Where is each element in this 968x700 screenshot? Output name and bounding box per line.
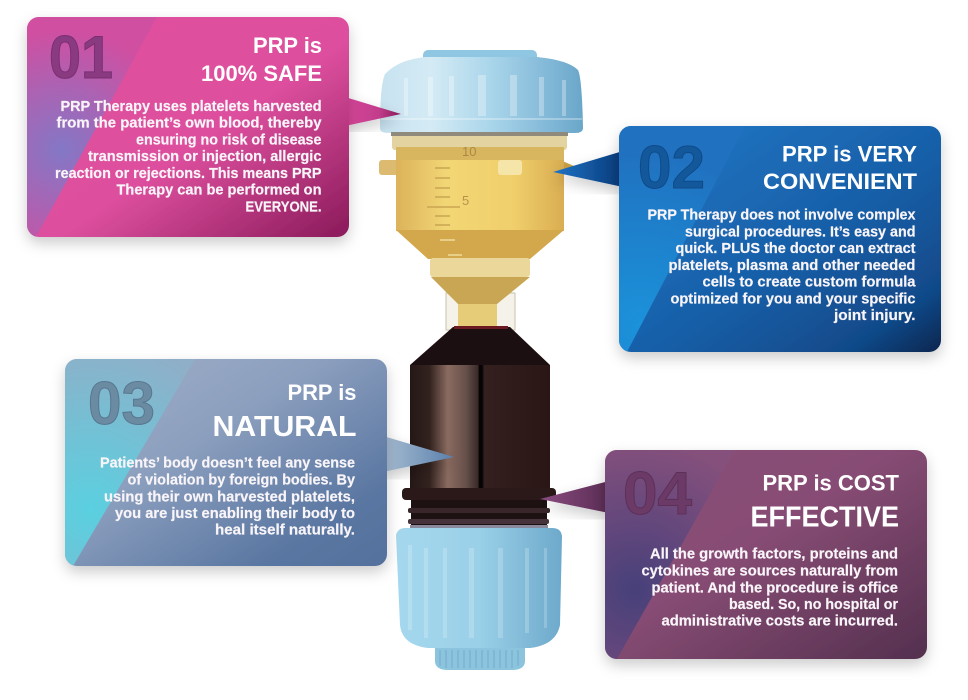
- body 03: using their own harvested platelets,: [104, 490, 355, 506]
- device: bottom cap: [396, 528, 562, 648]
- device: top cap: [380, 57, 583, 133]
- PRP separation device: [379, 50, 583, 670]
- panel 01 background: [27, 17, 349, 237]
- panel 04 background: [605, 450, 927, 659]
- body 01: from the patient’s own blood, thereby: [56, 116, 322, 132]
- pointer 03: [383, 436, 454, 472]
- device: scale number 5: 5: [462, 193, 469, 208]
- device: right tab: [498, 160, 574, 177]
- body 02: quick. PLUS the doctor can extract: [676, 241, 916, 257]
- heading 01: [201, 33, 322, 86]
- body 02: optimized for you and your specific: [670, 292, 916, 308]
- panel 01: 100% safe: [27, 17, 401, 237]
- device: bottom nut: [435, 648, 525, 670]
- pointer 04: [540, 481, 609, 513]
- pointer 02: [553, 151, 623, 187]
- heading 02: CONVENIENT: [763, 169, 918, 194]
- heading 01: 100% SAFE: [201, 61, 322, 86]
- panel 04: cost effective: [540, 450, 927, 659]
- body 01: reaction or rejections. This means PRP: [55, 166, 322, 182]
- body 04: based. So, no hospital or: [729, 597, 898, 613]
- body 01: [55, 99, 322, 216]
- heading 02: [763, 142, 918, 194]
- heading 03: NATURAL: [212, 411, 356, 443]
- body 02: PRP Therapy does not involve complex: [648, 208, 916, 224]
- body 04: All the growth factors, proteins and: [650, 546, 898, 562]
- body 02: [648, 208, 916, 324]
- device: cone: [396, 230, 564, 259]
- heading 04: EFFECTIVE: [750, 502, 899, 534]
- panel 04 diagonal: [605, 450, 718, 659]
- body 01: EVERYONE.: [246, 200, 322, 216]
- panel 01 diagonal: [27, 17, 157, 237]
- body 03: heal itself naturally.: [215, 522, 355, 538]
- heading 02: PRP is VERY: [782, 142, 917, 166]
- body 04: patient. And the procedure is office: [652, 580, 898, 596]
- body 01: transmission or injection, allergic: [88, 149, 322, 165]
- body 04: cytokines are sources naturally from: [642, 564, 898, 580]
- number 02: 02: [638, 134, 705, 201]
- panel 02 diagonal: [619, 126, 718, 352]
- device: dark body: [410, 365, 550, 489]
- heading 04: PRP is COST: [762, 470, 900, 496]
- device: upper plasma band: [396, 147, 564, 160]
- device: tab highlight: [498, 160, 522, 175]
- body 01: Therapy can be performed on: [116, 182, 322, 198]
- device: scale number 10: 10: [462, 144, 476, 159]
- device: glass neck: [446, 293, 515, 330]
- body 01: ensuring no risk of disease: [136, 132, 322, 148]
- device: neck liquid: [458, 300, 497, 326]
- device: dark blood chamber: [410, 327, 550, 365]
- heading 04: [750, 470, 900, 534]
- body 02: platelets, plasma and other needed: [668, 258, 916, 274]
- panel 02: very convenient: [553, 126, 941, 352]
- body 02: cells to create custom formula: [702, 274, 916, 290]
- heading 03: [212, 380, 356, 443]
- body 02: surgical procedures. It’s easy and: [685, 224, 916, 240]
- heading 01: PRP is: [253, 33, 322, 58]
- body 03: [100, 456, 356, 538]
- device: lower cone: [431, 277, 530, 304]
- heading 03: PRP is: [288, 380, 356, 405]
- panel 03 diagonal: [65, 359, 195, 566]
- panel 03 background: [65, 359, 387, 566]
- panel 03: natural: [65, 359, 454, 566]
- device: top rim: [423, 50, 537, 62]
- body 02: joint injury.: [833, 308, 916, 324]
- device: clear band: [392, 130, 567, 150]
- device: red ring: [454, 326, 508, 329]
- body 01: PRP Therapy uses platelets harvested: [60, 99, 322, 115]
- number 03: 03: [88, 370, 155, 437]
- device: plasma chamber: [396, 147, 564, 231]
- body 03: you are just enabling their body to: [115, 506, 355, 522]
- device: left tab: [379, 160, 405, 175]
- body 04: administrative costs are incurred.: [662, 614, 898, 630]
- body 03: of violation by foreign bodies. By: [128, 472, 356, 488]
- pointer 01: [345, 97, 401, 126]
- number 01: 01: [49, 24, 113, 91]
- device: scale ticks: [427, 168, 460, 225]
- body 04: [642, 546, 898, 630]
- device: threaded ring: [402, 488, 556, 531]
- body 03: Patients’ body doesn’t feel any sense: [100, 456, 355, 472]
- panel 02 background: [619, 126, 941, 352]
- number 04: 04: [623, 460, 693, 527]
- device: collar: [430, 258, 530, 277]
- device: cone ticks: [440, 240, 462, 255]
- device: cap seal: [391, 132, 568, 136]
